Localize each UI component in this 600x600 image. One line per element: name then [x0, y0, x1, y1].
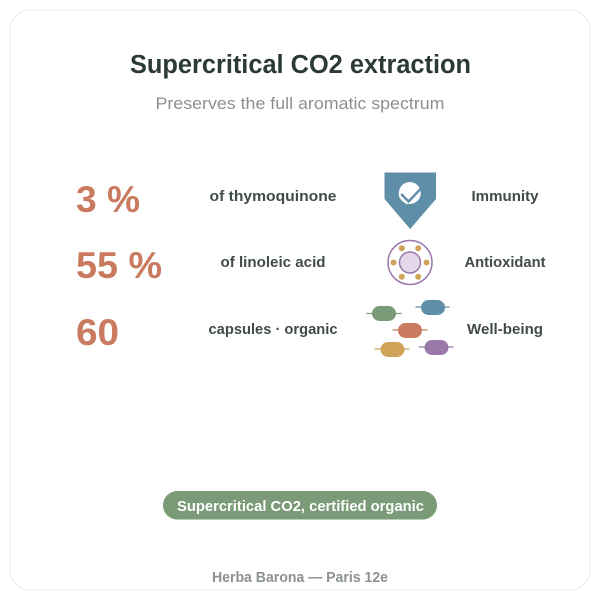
footer: Herba Barona — Paris 12e	[212, 570, 388, 586]
stat value: 55 %: 55 %	[76, 245, 162, 286]
stat row: linoleic acid	[76, 245, 326, 286]
icon: antioxidant cell	[388, 240, 432, 284]
capsule: purple	[419, 340, 454, 355]
label: Antioxidant: Antioxidant	[464, 254, 546, 271]
capsule: green	[366, 306, 402, 321]
label: Immunity: Immunity	[472, 188, 539, 205]
stat value: 60: 60	[76, 312, 119, 353]
icon: shield with check	[384, 172, 436, 229]
title: Supercritical CO2 extraction	[130, 51, 471, 79]
subtitle: Preserves the full aromatic spectrum	[156, 94, 444, 113]
label: Well-being: Well-being	[467, 321, 543, 338]
badge: Supercritical CO2, certified organic	[177, 498, 424, 515]
stat value: 3 %: 3 %	[76, 179, 140, 220]
stat label: capsules organic: capsules · organic	[208, 321, 338, 338]
capsule: ochre	[374, 342, 410, 357]
icon: capsules group	[366, 300, 454, 357]
badge	[163, 491, 437, 520]
stat label: of linoleic acid: of linoleic acid	[220, 254, 326, 271]
stat label: of thymoquinone: of thymoquinone	[210, 188, 336, 205]
capsule: terracotta	[392, 323, 428, 338]
stat row: capsules	[76, 312, 338, 353]
stat row: thymoquinone	[76, 179, 336, 220]
capsule: blue	[416, 300, 450, 315]
